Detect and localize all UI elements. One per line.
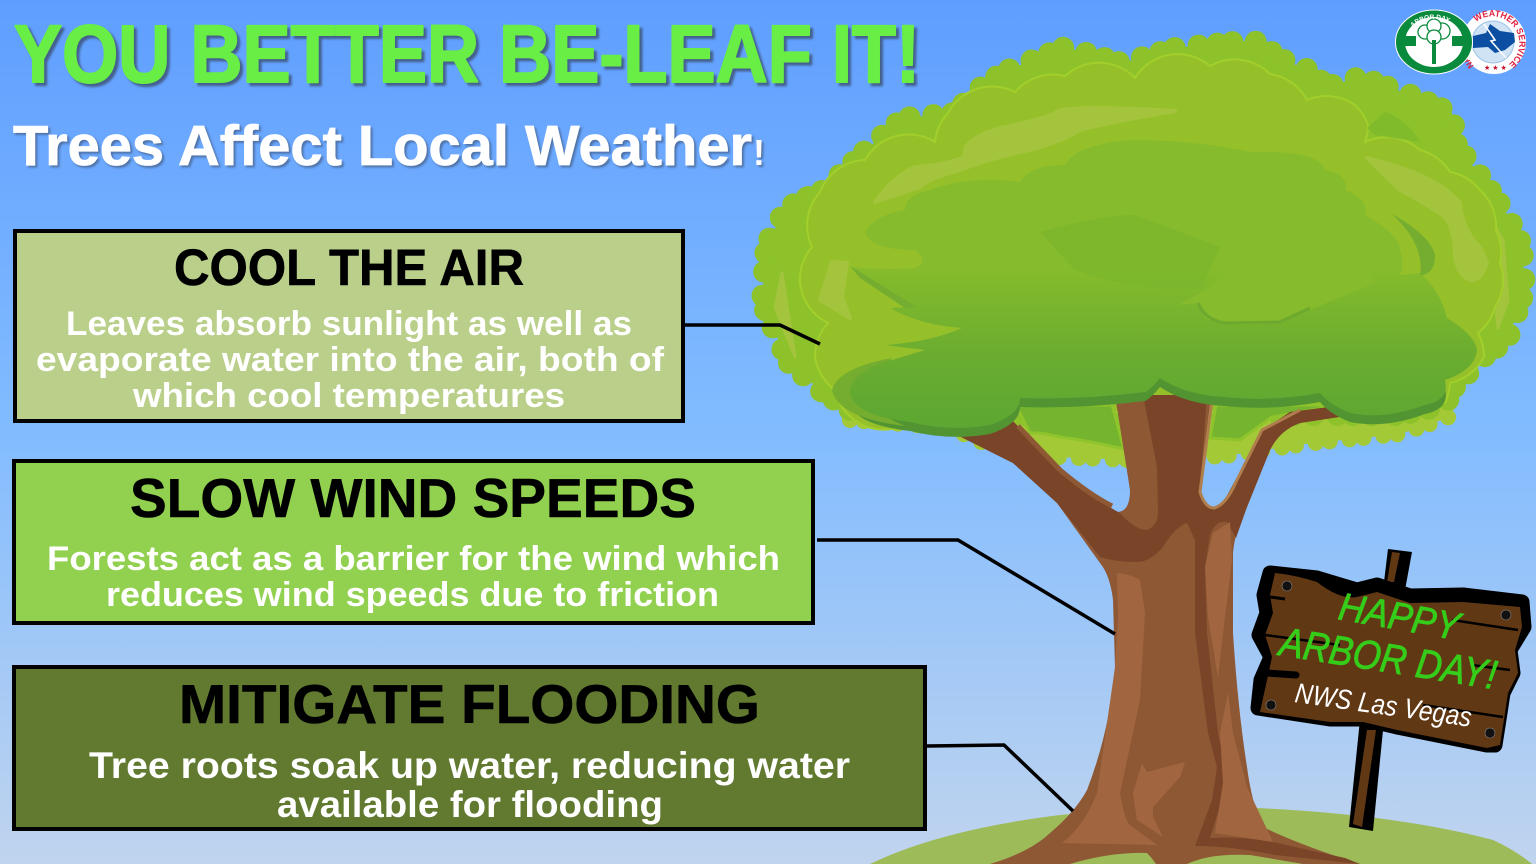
logo stars: ★ ★ ★ bbox=[1484, 64, 1507, 72]
text: mitigate flooding: Tree roots soak up water, reducing water bbox=[89, 745, 850, 786]
sign board bbox=[1258, 573, 1524, 745]
text: slow wind speeds: Forests act as a barrier for the wind which bbox=[47, 540, 780, 578]
connector: mitigate flooding bbox=[927, 745, 1073, 811]
sign wood bbox=[1260, 573, 1522, 748]
sign text: happy: HAPPY bbox=[1335, 586, 1466, 650]
panel: mitigate flooding bbox=[14, 667, 925, 829]
trunk highlights bbox=[1062, 522, 1273, 845]
connector: cool the air bbox=[685, 325, 820, 344]
foliage between branches bbox=[1016, 405, 1340, 449]
panel: slow wind speeds bbox=[14, 461, 813, 623]
canopy lower fringe bbox=[850, 380, 1450, 460]
canopy middle foliage bbox=[800, 54, 1503, 430]
text: mitigate flooding bbox=[89, 745, 850, 825]
canopy outer foliage bbox=[762, 40, 1525, 415]
sign plank lines bbox=[1265, 597, 1518, 717]
heading: slow wind speeds: SLOW WIND SPEEDS bbox=[130, 467, 696, 529]
connector: slow wind bbox=[817, 540, 1115, 634]
sign bbox=[1258, 549, 1524, 831]
text: mitigate flooding: available for flooding bbox=[277, 784, 663, 825]
trunk branch stripe bbox=[1018, 426, 1112, 506]
tree bbox=[762, 40, 1525, 864]
canopy left dark rim bbox=[832, 358, 905, 426]
title: YOU BETTER BE-LEAF IT! bbox=[14, 9, 920, 100]
ground between roots bbox=[1070, 853, 1303, 864]
logo: national weather service: WEATHER SERVICE bbox=[1472, 10, 1526, 68]
text: cool the air: Leaves absorb sunlight as well as bbox=[66, 305, 632, 343]
text: slow wind speeds: reduces wind speeds due to friction bbox=[106, 576, 719, 614]
logo: arbor day bbox=[1395, 10, 1473, 74]
trunk bbox=[953, 395, 1360, 864]
sign post top bbox=[1383, 549, 1412, 590]
heading: mitigate flooding: MITIGATE FLOODING bbox=[179, 673, 760, 735]
foliage darker patch top right bbox=[1367, 112, 1420, 142]
text: cool the air: evaporate water into the air, both of bbox=[36, 341, 665, 379]
heading: cool the air: COOL THE AIR bbox=[174, 239, 524, 296]
trunk tan edge bbox=[1200, 400, 1300, 508]
canopy left shadow bbox=[850, 266, 917, 308]
sign screws bbox=[1266, 581, 1511, 738]
sign post bottom bbox=[1349, 700, 1386, 831]
text: slow wind speeds bbox=[47, 540, 780, 614]
sign text: arbor day: ARBOR DAY! bbox=[1274, 618, 1500, 698]
text: cool the air: which cool temperatures bbox=[132, 377, 565, 415]
canopy blob outline bbox=[1198, 303, 1310, 323]
canopy left and right light patches bbox=[775, 205, 1508, 357]
trunk base shape bbox=[953, 395, 1360, 864]
canopy mid shade bbox=[1040, 215, 1220, 290]
canopy light blob bbox=[1178, 272, 1375, 324]
canopy shadow rim bbox=[850, 369, 1446, 437]
canopy right shadow bbox=[1392, 214, 1435, 275]
foliage light highlights bbox=[820, 108, 1487, 318]
canopy deep green crown bbox=[850, 140, 1477, 428]
panel: cool the air bbox=[15, 231, 683, 421]
sign text: nws las vegas: NWS Las Vegas bbox=[1293, 677, 1474, 733]
text: cool the air bbox=[36, 305, 665, 415]
subtitle: Trees Affect Local Weather bbox=[13, 114, 752, 178]
subtitle: ! bbox=[753, 132, 765, 173]
logo: arbor day: ARBOR DAY bbox=[1411, 14, 1450, 26]
trunk dark shading bbox=[953, 395, 1360, 864]
logo text: na: NA bbox=[1460, 55, 1476, 71]
ground hill bbox=[870, 807, 1532, 864]
